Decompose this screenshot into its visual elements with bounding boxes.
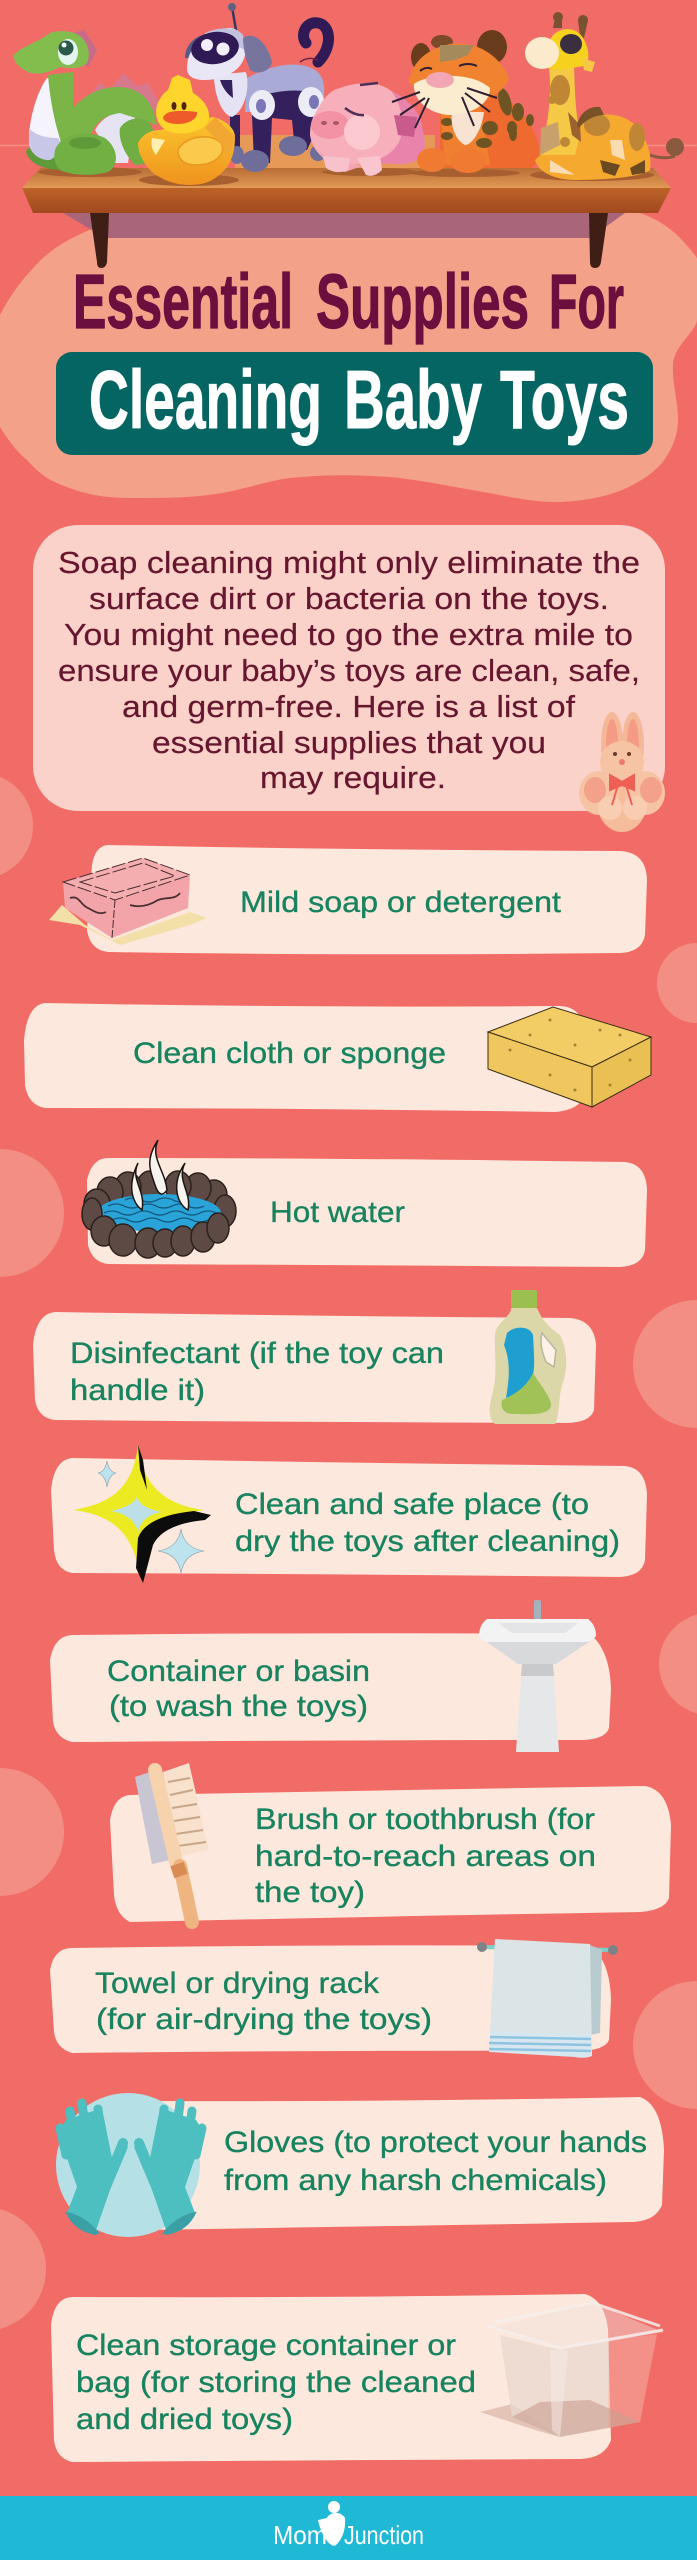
intro panel xyxy=(33,525,665,811)
icon: clear storage box xyxy=(480,2303,663,2437)
item: clean and safe place: Clean and safe place (to xyxy=(235,1488,589,1521)
item: hot water: Hot water xyxy=(270,1196,405,1229)
item: clean cloth or sponge xyxy=(24,1003,584,1112)
item: brush xyxy=(110,1786,671,1922)
toy: robot dog xyxy=(185,3,329,172)
item: storage container: bag (for storing the cleaned xyxy=(76,2366,476,2399)
icon: towel on rail xyxy=(477,1939,618,2058)
item: mild soap: Mild soap or detergent xyxy=(240,886,562,919)
toy: rubber duck xyxy=(138,75,239,186)
icon: sparkle stars xyxy=(73,1445,211,1583)
intro panel: and germ-free. Here is a list of xyxy=(122,689,575,724)
item: container or basin: (to wash the toys) xyxy=(109,1690,368,1723)
footer band xyxy=(0,2496,697,2560)
toy: orange tiger xyxy=(392,30,539,177)
intro panel: surface dirt or bacteria on the toys. xyxy=(89,581,609,616)
icon: scrub brush xyxy=(135,1763,209,1922)
icon: plush bunny xyxy=(579,712,665,832)
title banner: Baby xyxy=(344,353,482,446)
item: disinfectant: Disinfectant (if the toy can xyxy=(70,1337,444,1370)
title line one: For xyxy=(549,259,624,345)
icon: sponge xyxy=(488,1007,651,1107)
item: brush: Brush or toothbrush (for xyxy=(255,1803,595,1836)
item: storage container: and dried toys) xyxy=(76,2403,293,2436)
item: clean and safe place: dry the toys after cleaning) xyxy=(235,1525,620,1558)
title line one: Essential xyxy=(73,259,293,345)
intro panel: You might need to go the extra mile to xyxy=(64,617,633,652)
item: gloves: Gloves (to protect your hands xyxy=(224,2126,647,2159)
shelf xyxy=(22,135,671,268)
intro panel: essential supplies that you xyxy=(152,725,546,760)
item: disinfectant xyxy=(33,1312,596,1423)
title line one: Supplies xyxy=(316,259,529,345)
footer logo: Mom xyxy=(273,2520,327,2550)
item: hot water xyxy=(87,1158,647,1267)
item: gloves xyxy=(130,2097,664,2230)
item: clean cloth or sponge: Clean cloth or sponge xyxy=(133,1037,446,1070)
intro panel: may require. xyxy=(260,760,446,795)
icon: hot spring xyxy=(82,1140,236,1258)
intro panel: ensure your baby’s toys are clean, safe, xyxy=(58,653,640,688)
title banner: Toys xyxy=(500,353,629,446)
footer logo xyxy=(273,2501,424,2550)
item: disinfectant: handle it) xyxy=(70,1374,205,1407)
wall line xyxy=(0,144,697,146)
item: brush: hard-to-reach areas on xyxy=(255,1840,596,1873)
item: container or basin: Container or basin xyxy=(107,1655,370,1688)
item: brush: the toy) xyxy=(255,1876,365,1909)
title banner xyxy=(56,352,653,455)
decorative background circles xyxy=(0,773,697,2331)
toy: giraffe xyxy=(525,12,684,181)
icon: disinfectant bottle xyxy=(490,1290,566,1424)
footer logo: Junction xyxy=(344,2520,424,2550)
item: towel: (for air-drying the toys) xyxy=(96,2003,432,2036)
item: clean and safe place xyxy=(51,1458,647,1577)
item: gloves: from any harsh chemicals) xyxy=(224,2164,607,2197)
icon: soap bar xyxy=(49,858,207,945)
intro panel: Soap cleaning might only eliminate the xyxy=(58,545,640,580)
toy: pink piggy bank xyxy=(310,83,425,176)
item: mild soap xyxy=(87,845,647,954)
item: storage container: Clean storage container or xyxy=(76,2329,456,2362)
item: towel xyxy=(50,1945,611,2053)
title banner: Cleaning xyxy=(89,353,322,446)
item: towel: Towel or drying rack xyxy=(95,1967,380,2000)
header blob xyxy=(0,213,697,502)
title line one xyxy=(73,259,624,345)
icon: pedestal sink xyxy=(479,1600,596,1752)
toy: green dinosaur xyxy=(14,30,160,177)
item: container or basin xyxy=(50,1633,611,1742)
item: storage container xyxy=(51,2294,611,2462)
icon: rubber gloves xyxy=(56,2093,204,2237)
